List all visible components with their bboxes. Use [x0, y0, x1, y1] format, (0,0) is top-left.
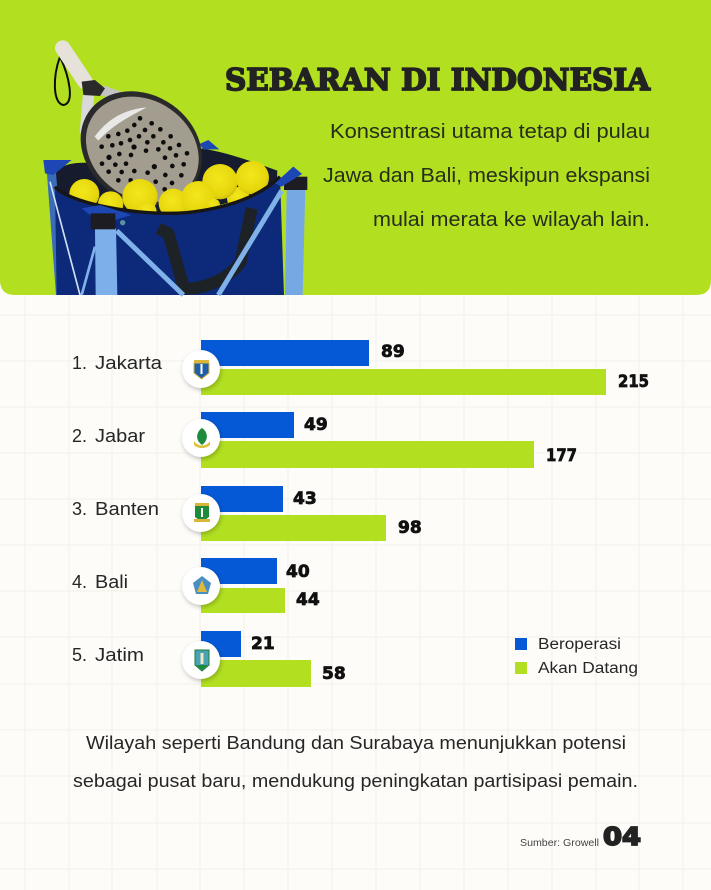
row: Bali: 4.: [72, 572, 87, 592]
row: Jabar: 2.: [72, 426, 87, 446]
diagonal braces: [117, 191, 282, 295]
row: Jabar: Jabar: [95, 426, 145, 446]
front pole: [95, 228, 117, 295]
row: Jatim: 58: [322, 664, 346, 684]
front flap: [82, 205, 132, 220]
photo: padel racket and ball basket: [43, 48, 307, 295]
row: Bali: 44: [296, 590, 320, 610]
basket bag front: [55, 177, 284, 295]
legend: [515, 636, 638, 677]
header description: Konsentrasi utama tetap di pulau: [330, 121, 650, 143]
row: Jakarta: Jakarta: [95, 353, 163, 373]
row: Jakarta: [72, 340, 649, 395]
row: Jatim: 5.: [72, 645, 87, 665]
row: Jabar: [72, 412, 577, 468]
row: Banten: 43: [293, 489, 317, 509]
loop strap: [55, 57, 70, 105]
racket: [55, 48, 224, 229]
legend: Akan Datang: [538, 660, 638, 677]
source: Sumber: Growell: [520, 837, 599, 849]
row: Jatim: Jatim: [95, 645, 144, 665]
row: Jabar: 49: [304, 415, 328, 435]
row: Jakarta: 89: [381, 342, 405, 362]
row: Banten: 3.: [72, 499, 87, 519]
racket throat: [85, 93, 89, 133]
header panel: [0, 0, 711, 295]
row: Jakarta: 1.: [72, 353, 87, 373]
title: SEBARAN DI INDONESIA: [225, 63, 651, 98]
row: Bali: Bali: [95, 572, 128, 592]
icon: Bali emblem: [193, 576, 211, 594]
racket grip: [63, 48, 85, 82]
tennis balls: [69, 161, 269, 222]
closing text: [73, 732, 638, 791]
bar chart: [72, 340, 649, 687]
closing text: sebagai pusat baru, mendukung peningkatan partisipasi pemain.: [73, 770, 638, 791]
row: Banten: [72, 486, 422, 541]
racket head: [58, 68, 224, 229]
bag handle: [158, 208, 252, 288]
basket corner flaps: [43, 140, 302, 187]
icon: Jakarta emblem: [194, 360, 209, 379]
row: Banten: 98: [398, 518, 422, 538]
row: Banten: Banten: [95, 499, 159, 519]
row: Jabar: 177: [546, 446, 577, 466]
icon: Banten emblem: [194, 503, 210, 522]
header description: mulai merata ke wilayah lain.: [373, 209, 650, 231]
header description: Jawa dan Bali, meskipun ekspansi: [323, 165, 650, 187]
right pole: [285, 189, 305, 295]
icon: Jatim emblem: [195, 650, 209, 671]
page number: 04: [603, 822, 641, 851]
icon: Jabar emblem: [194, 428, 210, 448]
row: Bali: [72, 558, 320, 613]
row: Jatim: [72, 631, 346, 687]
header description: [323, 121, 650, 231]
basket interior: [56, 148, 277, 213]
row: Jatim: 21: [251, 634, 275, 654]
row: Bali: 40: [286, 562, 310, 582]
racket holes: [99, 116, 189, 192]
closing text: Wilayah seperti Bandung dan Surabaya menunjukkan potensi: [86, 732, 626, 753]
legend: Beroperasi: [538, 636, 621, 653]
row: Jakarta: 215: [618, 372, 649, 392]
back left pole: [47, 170, 68, 295]
